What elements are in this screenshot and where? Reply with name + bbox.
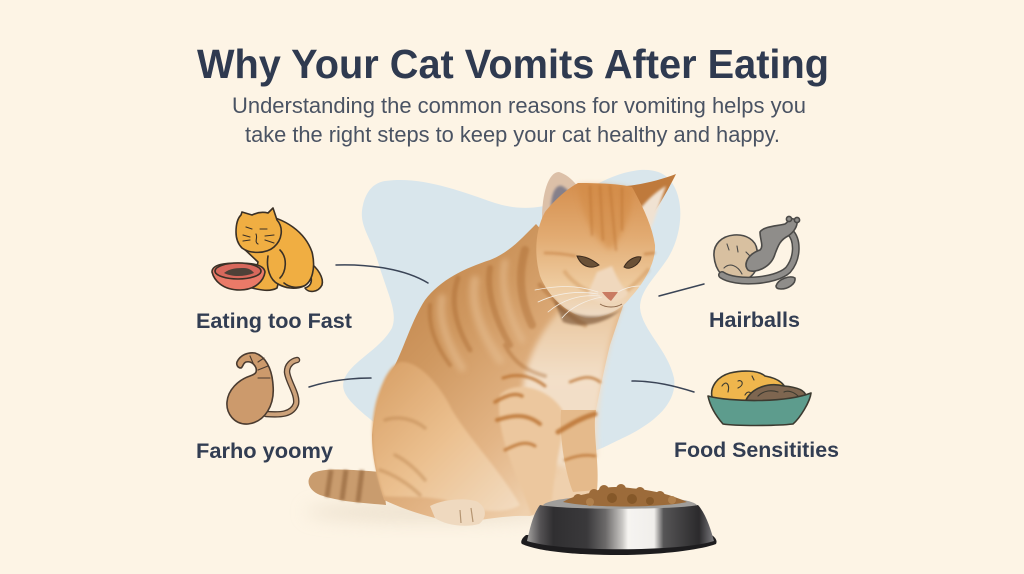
food bowl <box>521 484 717 555</box>
label: Hairballs: Hairballs <box>709 308 800 332</box>
bowl body <box>527 505 714 549</box>
connector lines <box>309 265 704 392</box>
forehead orange wash <box>578 185 632 250</box>
icon: cat eating from bowl <box>212 208 322 291</box>
head <box>536 183 655 318</box>
label: Farho yoomy: Farho yoomy <box>196 439 333 463</box>
haunch stripes <box>380 418 425 495</box>
subtitle: take the right steps to keep your cat healthy and happy. <box>245 122 780 147</box>
kibble <box>563 484 687 506</box>
nose and muzzle <box>589 266 628 307</box>
icon: stomach with tail <box>227 353 297 424</box>
forehead stripes <box>545 186 654 292</box>
whiskers <box>535 286 640 318</box>
icon: hairballs <box>714 216 800 289</box>
eyes <box>577 256 641 268</box>
paw <box>430 499 485 526</box>
haunch <box>372 362 520 511</box>
chest <box>522 305 622 469</box>
front leg left <box>499 387 566 516</box>
soft lighter back bands <box>441 262 522 368</box>
subtitle <box>232 93 806 147</box>
body silhouette <box>372 224 625 522</box>
soft floor shadow <box>305 502 555 522</box>
icon: food sensitivities bowl <box>708 371 811 426</box>
leg stripes <box>495 376 600 460</box>
tail <box>309 469 386 505</box>
label: Food Sensitities: Food Sensitities <box>674 438 839 462</box>
shadow under chin <box>552 296 626 325</box>
bowl base <box>521 534 717 555</box>
bowl rim <box>543 496 697 510</box>
label: Eating too Fast: Eating too Fast <box>196 309 352 333</box>
front leg right <box>561 410 598 492</box>
blue background blob <box>343 170 680 452</box>
cat photo illustration <box>305 172 676 526</box>
subtitle: Understanding the common reasons for vomiting helps you <box>232 93 806 118</box>
dark back markings <box>430 250 585 376</box>
ears <box>542 172 590 228</box>
title: Why Your Cat Vomits After Eating <box>197 41 829 87</box>
